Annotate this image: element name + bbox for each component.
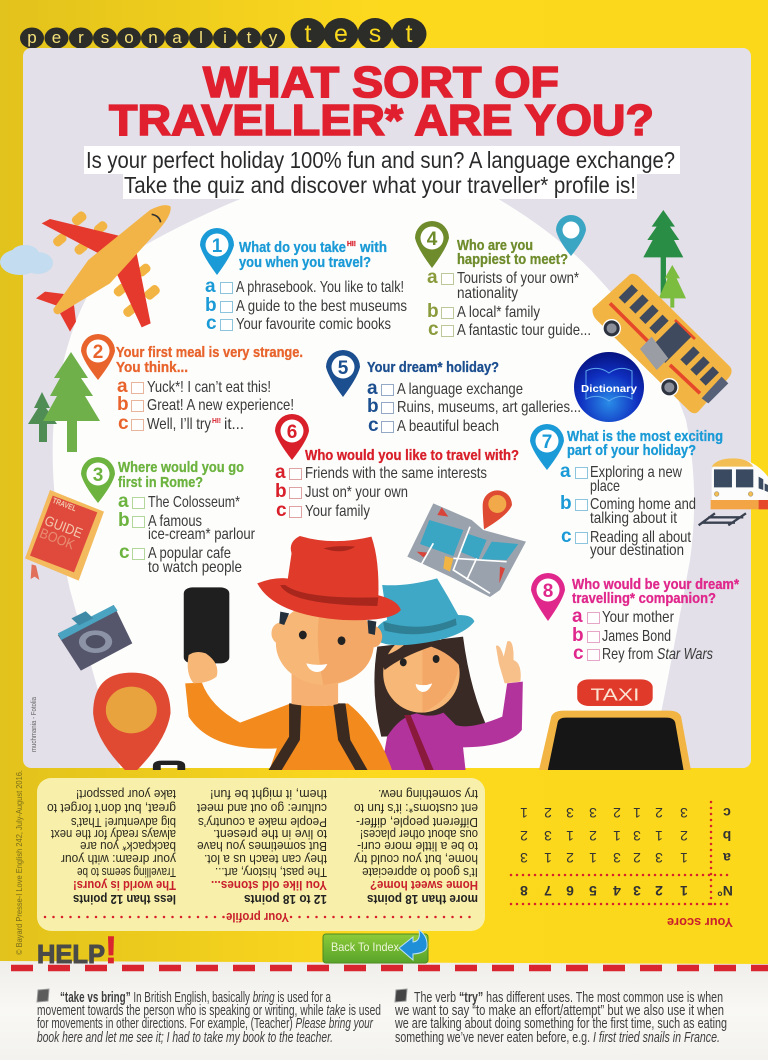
- profile: more than 18 points: more than 18 points: [367, 892, 478, 906]
- options 7: a: [560, 461, 571, 482]
- score table (upside down): 1: [589, 850, 597, 866]
- taxi: [539, 679, 691, 770]
- header badge: personality test: o: [124, 28, 134, 47]
- options 4: nationality: [457, 285, 518, 302]
- profile: less than 12 points: always ready for the next: [51, 827, 176, 841]
- options 1: [205, 276, 407, 334]
- illustration: trees left: [28, 352, 100, 452]
- options 4: A local* family: [457, 304, 540, 321]
- heading 1: What do you take: [239, 240, 346, 256]
- header badge: personality test: [20, 18, 426, 50]
- score table (upside down): 1: [613, 828, 621, 844]
- options 6: c: [276, 500, 287, 521]
- heading 6: Who would you like to travel with?: [305, 448, 519, 464]
- heading 4: [457, 238, 568, 268]
- options 3: c: [119, 542, 130, 563]
- header badge: personality test: r: [78, 28, 84, 47]
- pin 4: [415, 221, 449, 268]
- score table (upside down): 2: [544, 805, 552, 821]
- Back To Index button: Back To Index: [331, 940, 399, 954]
- profile: less than 12 points: your dream: with your: [61, 852, 176, 866]
- score table (upside down): 2: [655, 883, 663, 899]
- question 1: [200, 228, 407, 334]
- big red location pin: [93, 673, 171, 770]
- options 1: b: [205, 295, 217, 316]
- options 5: a: [367, 378, 378, 399]
- options 5: A language exchange: [397, 381, 523, 398]
- score table (upside down): 3: [566, 805, 574, 821]
- options 8: a: [572, 606, 583, 627]
- header badge: personality test: e: [334, 20, 348, 48]
- score table (upside down): 2: [613, 805, 621, 821]
- heading 8: Who would be your dream*: [572, 577, 739, 593]
- options 7: [560, 461, 696, 559]
- question 5: [326, 350, 581, 436]
- header badge: personality test: t: [305, 20, 312, 48]
- score table (upside down): 3: [613, 850, 621, 866]
- score table (upside down): Your score: [667, 915, 733, 930]
- red dashed divider: [11, 965, 768, 971]
- options 5: b: [367, 396, 379, 417]
- taxi: TAXI: [590, 685, 639, 705]
- options 6: a: [275, 462, 286, 483]
- heading 8: [572, 577, 739, 607]
- profile: less than 12 points: The world is yours!: [73, 878, 176, 892]
- options 7: place: [590, 478, 620, 495]
- profile: 12 to 18 points: 12 to 18 points: [244, 892, 327, 906]
- title: WHAT SORT OF: [203, 58, 559, 107]
- footer white band: [0, 961, 768, 1060]
- HELP! logo: HELP: [37, 939, 105, 969]
- title: [109, 58, 654, 145]
- profile: more than 18 points: home, but you could try: [353, 852, 478, 866]
- upside-down profile text: [47, 787, 478, 924]
- illustration: camera: [58, 605, 132, 671]
- options 8: b: [572, 625, 584, 646]
- pin 1: [200, 228, 234, 275]
- score table (upside down): 3: [633, 883, 641, 899]
- Dictionary button: Dictionary: [581, 383, 637, 395]
- pin 3: [81, 457, 115, 503]
- question 7: [530, 424, 723, 559]
- options 6: [275, 462, 487, 521]
- heading 3: Where would you go: [118, 460, 244, 476]
- score table (upside down): 1: [566, 828, 574, 844]
- options 4: Tourists of your own*: [457, 270, 579, 287]
- profile: 12 to 18 points: they can teach us a lot.: [204, 852, 327, 866]
- options 7: your destination: [590, 542, 684, 559]
- pin 5: 5: [338, 358, 349, 379]
- score table (upside down): 3: [633, 828, 641, 844]
- profile: 12 to 18 points: People make a country’s: [198, 815, 327, 829]
- score table (upside down): 8: [520, 883, 528, 899]
- illustration: green trees right: [643, 210, 686, 308]
- illustration: train: [699, 458, 768, 525]
- score table (upside down): 1: [544, 850, 552, 866]
- heading 7: [567, 429, 723, 459]
- options 6: Your family: [305, 503, 370, 520]
- profile: 12 to 18 points: The past, history, art...: [215, 865, 327, 879]
- Dictionary button: [574, 352, 644, 422]
- options 6: Just on* your own: [305, 484, 408, 501]
- profile: less than 12 points: great, but don’t forget to: [47, 801, 176, 815]
- options 1: A guide to the best museums: [236, 298, 407, 315]
- score table (upside down): a: [723, 850, 731, 866]
- header badge: personality test: p: [27, 28, 37, 47]
- options 3: b: [118, 510, 130, 531]
- options 5: c: [368, 415, 379, 436]
- heading 1: HI!: [347, 241, 356, 248]
- heading 7: part of your holiday?: [567, 443, 696, 459]
- heading 4: Who are you: [457, 238, 533, 254]
- score table (upside down): 1: [680, 883, 688, 899]
- profile: less than 12 points: [47, 787, 176, 906]
- profile: more than 18 points: Different people, differ-: [356, 815, 478, 829]
- header badge: personality test: s: [369, 20, 381, 48]
- score table (upside down): 3: [680, 805, 688, 821]
- header badge: personality test: t: [247, 28, 252, 47]
- heading 8: travelling* companion?: [572, 591, 716, 607]
- note: take vs bring: “take vs bring” In British English, basically bring is used for a: [60, 990, 332, 1006]
- options 2: b: [117, 394, 129, 415]
- options 2: [117, 376, 294, 434]
- your profile panel (upside down): [37, 778, 485, 931]
- score table (upside down): 2: [680, 828, 688, 844]
- score table (upside down): 4: [613, 883, 621, 899]
- options 3: a: [118, 491, 129, 512]
- score table (upside down): 3: [520, 850, 528, 866]
- illustration: guide book: BOOK: [38, 525, 77, 553]
- options 4: a: [427, 267, 438, 288]
- illustration: aeroplane: [36, 205, 171, 332]
- pin 1: 1: [212, 236, 223, 257]
- options 5: [367, 378, 581, 436]
- options 1: a: [205, 276, 216, 297]
- options 7: Exploring a new: [590, 464, 682, 481]
- score table (upside down): 2: [589, 828, 597, 844]
- pin 4: 4: [427, 229, 438, 250]
- photo credit: muchmania - Fotolia: [31, 697, 38, 752]
- profile: less than 12 points: backpack* you are: [80, 839, 176, 853]
- score table (upside down): 1: [680, 850, 688, 866]
- question 2: [81, 334, 303, 434]
- illustration: cloud: [0, 245, 53, 275]
- subtitle: Is your perfect holiday 100% fun and sun? A language exchange?: [86, 147, 675, 173]
- options 2: Great! A new experience!: [147, 397, 294, 414]
- HELP! logo: [37, 930, 117, 972]
- Back To Index button: [323, 930, 428, 963]
- options 2: HI!: [212, 418, 221, 425]
- options 2: a: [117, 376, 128, 397]
- score table (upside down): N°: [717, 883, 733, 899]
- pin 6: 6: [287, 422, 297, 443]
- options 8: [572, 606, 713, 664]
- score table (upside down): [511, 802, 733, 930]
- score table (upside down): 3: [544, 828, 552, 844]
- profile: more than 18 points: It’s good to appreciate: [362, 865, 478, 879]
- pin 5: [326, 350, 360, 397]
- options 4: b: [427, 301, 439, 322]
- question 8: [531, 573, 739, 664]
- profile: 12 to 18 points: [196, 787, 327, 906]
- profile: more than 18 points: to be a little more curi-: [357, 839, 478, 853]
- question 6: [275, 414, 519, 521]
- options 5: Ruins, museums, art galleries...: [397, 399, 581, 416]
- score table (upside down): 3: [655, 850, 663, 866]
- heading 2: [116, 345, 303, 376]
- heading 7: What is the most exciting: [567, 429, 723, 445]
- subtitle: Take the quiz and discover what your traveller* profile is!: [124, 172, 636, 198]
- pin 2: 2: [93, 342, 103, 363]
- options 1: c: [206, 313, 217, 334]
- illustration: guide book: TRAVEL: [51, 496, 78, 513]
- note: verb try: something we’ve never eaten before, e.g. I first tried snails in France.: [395, 1030, 720, 1046]
- white central spotlight: [53, 197, 694, 768]
- note: verb try: [394, 989, 727, 1046]
- options 2: it...: [224, 416, 244, 433]
- options 3: A famous: [148, 513, 202, 530]
- options 7: c: [561, 526, 572, 547]
- score table (upside down): 2: [655, 805, 663, 821]
- subtitle: [84, 146, 680, 199]
- profile: 12 to 18 points: culture: go out and meet: [196, 801, 327, 815]
- note: take vs bring: book here and let me see it; I had to take my book to the teacher.: [37, 1030, 333, 1046]
- luggage handle: [153, 761, 185, 770]
- options 8: James Bond: [602, 628, 671, 645]
- header badge: personality test: e: [52, 28, 61, 47]
- score table (upside down): 1: [633, 805, 641, 821]
- options 7: b: [560, 493, 572, 514]
- HELP! logo: !: [105, 930, 117, 972]
- options 5: A beautiful beach: [397, 418, 499, 435]
- header badge: personality test: i: [223, 28, 227, 47]
- options 3: [118, 491, 256, 576]
- profile: less than 12 points: less than 12 points: [73, 892, 176, 906]
- pin 2: [81, 334, 115, 380]
- note: take vs bring: for movements in other directions. For example, (Teacher) Please bring your: [37, 1016, 374, 1032]
- profile: more than 18 points: [353, 787, 478, 906]
- icon: book: [395, 989, 407, 1002]
- heading 2: Your first meal is very strange.: [116, 345, 303, 361]
- heading 1: [239, 240, 387, 271]
- note: take vs bring: [37, 989, 381, 1046]
- options 7: talking about it: [590, 510, 677, 527]
- options 3: to watch people: [148, 559, 242, 576]
- pin 6: [275, 414, 309, 460]
- options 8: Your mother: [602, 609, 675, 626]
- score table (upside down): 2: [566, 850, 574, 866]
- header badge: personality test: s: [101, 28, 109, 47]
- profile: more than 18 points: try something new.: [378, 787, 478, 801]
- pin 7: 7: [542, 432, 552, 453]
- options 2: Well, I’ll try: [147, 416, 211, 433]
- options 3: A popular cafe: [148, 545, 231, 562]
- options 7: Coming home and: [590, 496, 696, 513]
- profile: less than 12 points: take your passport!: [76, 787, 176, 801]
- girl: [372, 578, 523, 770]
- options 6: b: [275, 481, 287, 502]
- options 8: Rey from Star Wars: [602, 646, 713, 663]
- header badge: personality test: n: [148, 28, 158, 47]
- main lavender panel: [23, 48, 751, 768]
- illustration: map with pin: [407, 490, 526, 597]
- profile: less than 12 points: Travelling seems to be: [77, 865, 176, 879]
- profile: more than 18 points: ent customs*: it’s fun to: [354, 801, 478, 815]
- illustration: blue location pin: [556, 215, 586, 256]
- profile: 12 to 18 points: But sometimes you have: [197, 839, 327, 853]
- options 2: Yuck*! I can’t eat this!: [147, 379, 271, 396]
- options 1: A phrasebook. You like to talk!: [236, 279, 404, 296]
- score table (upside down): 7: [544, 883, 552, 899]
- options 7: Reading all about: [590, 529, 691, 546]
- score table (upside down): 5: [589, 883, 597, 899]
- options 8: c: [573, 643, 584, 664]
- illustration: guide book: GUIDE: [42, 512, 85, 541]
- pin 7: [530, 424, 564, 470]
- copyright credit: © Bayard Presse-I Love English 242, July-August 2016.: [14, 770, 24, 955]
- profile: 12 to 18 points: You like old stones...: [211, 878, 327, 892]
- score table (upside down): 1: [520, 805, 528, 821]
- score table (upside down): 1: [655, 828, 663, 844]
- icon: book: [37, 989, 49, 1002]
- title: TRAVELLER* ARE YOU?: [109, 96, 654, 145]
- header badge: personality test: t: [406, 20, 413, 48]
- profile: more than 18 points: ous about other places!: [360, 827, 478, 841]
- options 2: c: [118, 413, 129, 434]
- score table (upside down): 2: [520, 828, 528, 844]
- heading 1: with: [359, 240, 387, 256]
- pin 3: 3: [93, 465, 103, 486]
- pin 8: [531, 573, 565, 621]
- illustration: tourists, pin, taxi: [93, 536, 691, 770]
- score table (upside down): 2: [633, 850, 641, 866]
- heading 1: you when you travel?: [239, 255, 371, 271]
- heading 2: You think...: [116, 360, 188, 376]
- question 4: [415, 221, 591, 340]
- options 3: The Colosseum*: [148, 494, 240, 511]
- question 3: [81, 457, 256, 576]
- profile: 12 to 18 points: them, it might be fun!: [210, 787, 327, 801]
- options 1: Your favourite comic books: [236, 316, 391, 333]
- profile: less than 12 points: big adventure! That’s: [71, 815, 176, 829]
- pin 8: 8: [543, 581, 553, 602]
- profile: more than 18 points: Home sweet home?: [370, 878, 478, 892]
- header badge: personality test: y: [269, 28, 278, 47]
- profile: 12 to 18 points: to live in the present.: [213, 827, 327, 841]
- boy: [184, 536, 401, 770]
- heading 4: happiest to meet?: [457, 252, 568, 268]
- score table (upside down): c: [723, 805, 731, 821]
- score table (upside down): b: [723, 828, 731, 844]
- illustration: guide book: [25, 490, 104, 581]
- heading 3: first in Rome?: [118, 475, 203, 491]
- icon: blue return arrow: [399, 930, 427, 960]
- upside-down profile text: Your profile: [226, 910, 289, 924]
- header badge: personality test: a: [172, 28, 182, 47]
- heading 3: [118, 460, 244, 491]
- options 3: ice-cream* parlour: [148, 526, 256, 543]
- options 4: A fantastic tour guide...: [457, 322, 591, 339]
- note: take vs bring: movement towards the person who is speaking or writing, while take is used: [37, 1003, 381, 1019]
- score table (upside down): 3: [589, 805, 597, 821]
- heading 5: Your dream* holiday?: [367, 360, 499, 376]
- illustration: bus: [592, 274, 732, 413]
- options 4: [427, 267, 591, 340]
- options 6: Friends with the same interests: [305, 465, 487, 482]
- score table (upside down): 6: [566, 883, 574, 899]
- options 4: c: [428, 319, 439, 340]
- header badge: personality test: l: [199, 28, 203, 47]
